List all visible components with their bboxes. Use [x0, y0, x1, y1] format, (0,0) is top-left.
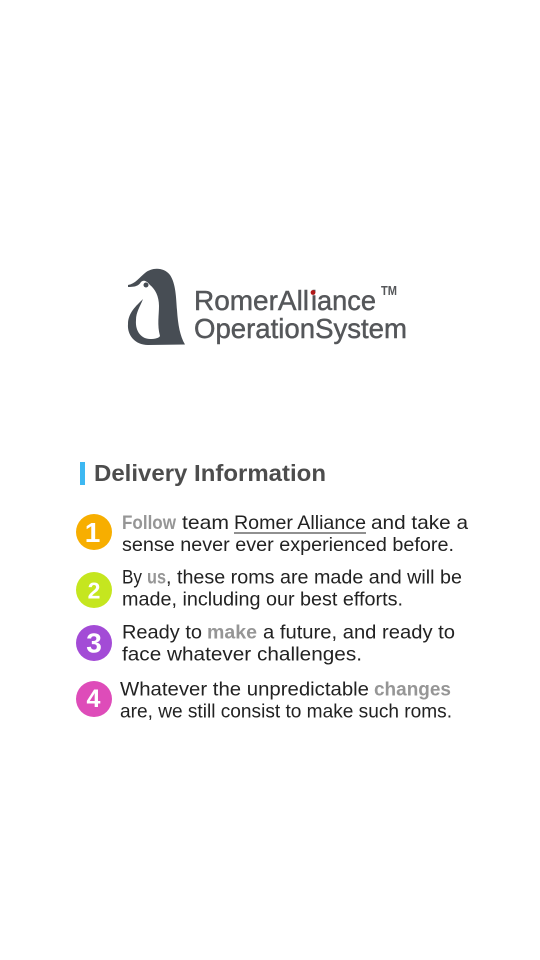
badge 1: 1	[85, 517, 100, 548]
wordmark: RomerAlliance: iance	[311, 285, 376, 316]
badge 2: 2	[88, 578, 100, 604]
item 2 text	[122, 566, 462, 610]
logo	[128, 269, 407, 345]
item 3 text: Ready to	[122, 622, 202, 644]
item 2	[76, 566, 462, 610]
badge 3	[76, 625, 112, 661]
badge 4	[76, 681, 112, 717]
red dot on the i	[311, 290, 315, 295]
item 2 text: us	[147, 566, 166, 588]
item 1	[76, 512, 468, 556]
item 4 text	[120, 678, 452, 722]
item 2 text: By	[122, 566, 142, 588]
badge 4: 4	[87, 685, 101, 713]
badge 3: 3	[86, 628, 102, 658]
item 3 text: a future, and ready to	[263, 622, 455, 644]
trademark: TM	[381, 284, 397, 298]
heading text: Delivery Information	[94, 460, 326, 486]
item 2 text: , these roms are made and will be	[166, 566, 462, 588]
wordmark: RomerAlliance: RomerAll	[194, 285, 309, 316]
heading: Delivery Information	[80, 460, 326, 486]
heading accent bar	[80, 462, 85, 485]
item 2 text: made, including our best efforts.	[122, 588, 403, 610]
item 1 text: and take a	[371, 512, 468, 534]
item 3 text	[122, 622, 455, 666]
item 4 text: Whatever the unpredictable	[120, 678, 369, 700]
item 3 text: face whatever challenges.	[122, 644, 362, 666]
wordmark: RomerAlliance	[194, 285, 376, 316]
badge 2	[76, 572, 112, 608]
item 3	[76, 622, 455, 666]
item 1 text: team	[182, 512, 229, 534]
item 4 text: are, we still consist to make such roms.	[120, 700, 452, 722]
item 1 text	[122, 512, 468, 556]
item 1 text: sense never ever experienced before.	[122, 534, 454, 556]
wordmark: OperationSystem: OperationSystem	[194, 313, 407, 344]
item 4	[76, 678, 452, 722]
item 4 text: changes	[374, 678, 451, 700]
icon: penguin	[128, 269, 185, 345]
item 3 text: make	[207, 622, 257, 644]
item 1 text: Follow	[122, 512, 177, 534]
item 1 text: Romer Alliance	[234, 512, 366, 534]
badge 1	[76, 514, 112, 550]
